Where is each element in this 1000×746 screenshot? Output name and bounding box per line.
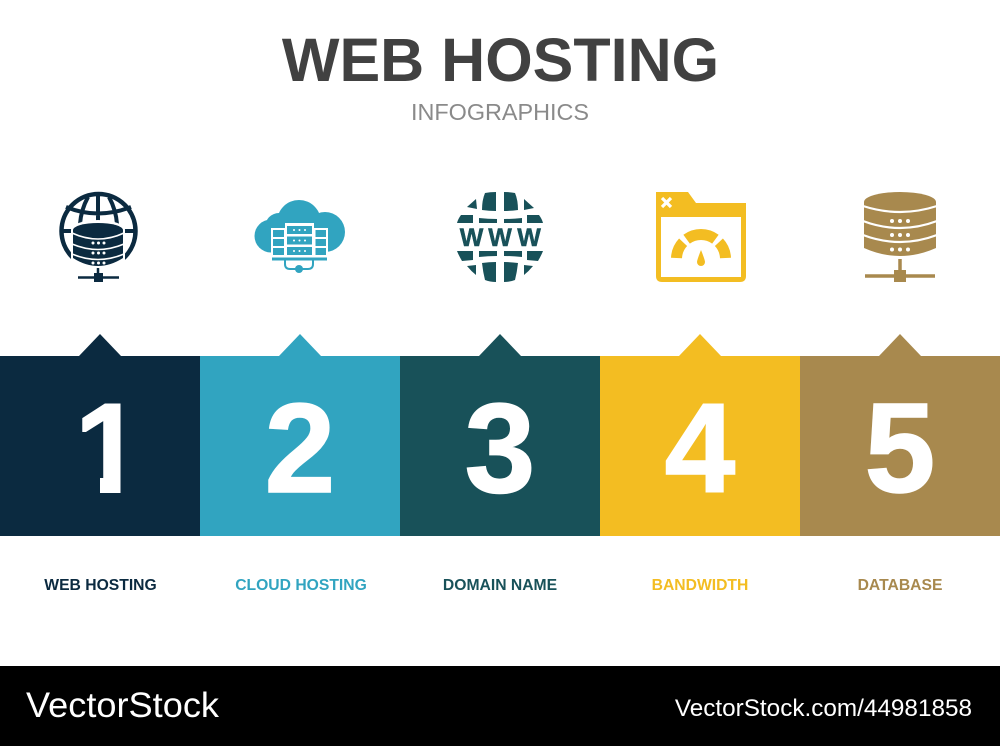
icon: www globe: W xyxy=(460,224,484,252)
panel: step 2: 2 xyxy=(265,377,335,519)
icon: bandwidth gauge window xyxy=(656,192,746,282)
panel: step 3 xyxy=(400,334,600,536)
title: WEB HOSTING xyxy=(282,26,719,94)
panel: step 4: 4 xyxy=(665,377,735,519)
panel: step 4 xyxy=(600,334,800,536)
panel: step 1 xyxy=(0,334,200,536)
panel: step 5: 5 xyxy=(865,377,935,519)
footer bar: VectorStock xyxy=(26,686,220,725)
subtitle: INFOGRAPHICS xyxy=(411,99,589,125)
icon: globe with database xyxy=(61,194,136,282)
label: database: DATABASE xyxy=(858,577,942,594)
panel: step 2 xyxy=(200,334,400,536)
label: bandwidth: BANDWIDTH xyxy=(652,577,748,594)
icon: cloud hosting xyxy=(254,200,345,273)
panel: step 3: 3 xyxy=(465,377,535,519)
icon: database xyxy=(863,192,937,282)
icon: www globe xyxy=(457,192,543,282)
panel: step 5 xyxy=(800,334,1000,536)
footer bar xyxy=(0,666,1000,746)
icon: www globe: W xyxy=(517,224,541,252)
icon: www globe: W xyxy=(488,224,512,252)
label: domain name: DOMAIN NAME xyxy=(443,577,557,594)
panel: step 1: 1 xyxy=(75,377,145,519)
footer bar: VectorStock.com/44981858 xyxy=(675,695,972,722)
label: cloud hosting: CLOUD HOSTING xyxy=(235,577,367,594)
label: web hosting: WEB HOSTING xyxy=(44,577,157,594)
